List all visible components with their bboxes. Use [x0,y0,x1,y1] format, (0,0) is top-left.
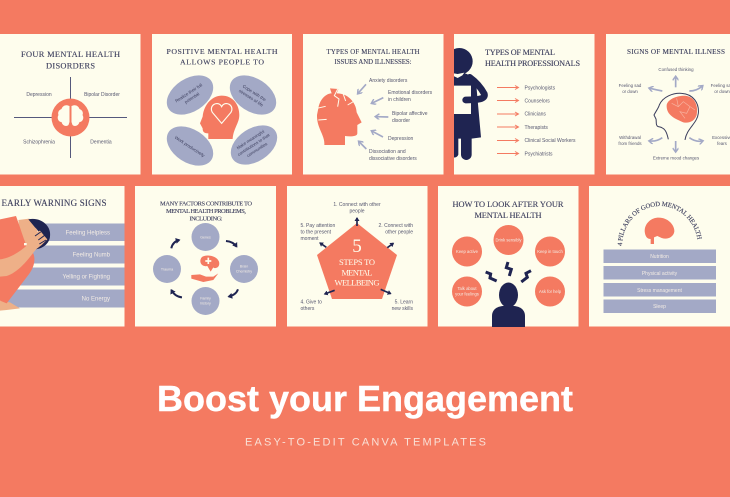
advice labels: Keep in touch [537,249,563,254]
step labels: to the present [300,230,332,236]
heading: types of issues: ISSUES AND ILLNESSES: [334,59,412,66]
heading: types of issues: TYPES OF MENTAL HEALTH [326,49,420,56]
step labels: 2. Connect with [379,223,413,229]
heading: early warning: EARLY WARNING SIGNS [2,198,106,208]
icon: professional with clipboard [454,48,488,160]
labels: Clinical Social Workers [524,138,576,144]
factor labels: history [200,302,211,306]
labels: Bipolar Disorder [84,92,120,98]
icon: brain in circle [52,98,90,136]
factor labels: Brain [240,264,248,268]
ellipse: meaningful contributions: contributions to their [237,132,271,157]
heading: four disorders: FOUR MENTAL HEALTH [21,50,120,59]
bar labels [63,230,111,302]
panel: positive mental health [152,34,292,174]
labels: Depression [388,136,414,142]
labels: Psychiatrists [524,152,553,158]
step labels: 5. Pay attention [300,223,335,229]
ellipse: work productively: Work productively [174,135,206,158]
ellipse: cope with stresses [223,67,283,123]
heading: types of professionals: TYPES OF MENTAL [485,48,555,57]
labels: Psychologists [524,86,556,92]
heading: curved 4 pillars: 4 PILLARS OF GOOD MENTAL HEALTH [618,202,702,246]
labels: Dementia [90,140,112,146]
bar labels: Yelling or Fighting [63,274,110,280]
panel: 5 steps [287,186,428,326]
advice labels: Keep active [456,249,479,254]
cross divider [14,77,127,158]
factor circles [153,223,258,315]
labels: disorder [392,118,410,124]
ellipse: meaningful contributions [224,117,284,173]
labels [369,78,433,162]
heading: positive mental health: POSITIVE MENTAL HEALTH [166,47,278,56]
bar labels: Feeling Numb [73,252,111,258]
labels: dissociative disorders [369,156,417,162]
labels: from friends [618,141,642,146]
bar labels: Feeling Helpless [66,230,110,236]
bar labels: No Energy [82,296,110,302]
step labels: 1. Connect with other [333,202,381,208]
arrows list [497,88,518,154]
step labels: new skills [392,306,413,312]
step labels [300,202,413,312]
icon: cracked head [317,88,362,145]
ellipse: realize potential: potential [184,91,200,105]
labels: Dissociation and [369,149,406,155]
labels: Clinicians [524,112,546,118]
pentagon text: MENTAL [342,268,372,278]
main headline: Boost your Engagement [157,378,573,419]
heading: types of professionals: HEALTH PROFESSIONALS [485,59,580,68]
panel: types of issues [303,34,444,174]
heading: many factors: MANY FACTORS CONTRIBUTE TO [160,200,252,208]
pentagon [317,223,397,299]
labels [524,86,576,158]
arrows [650,77,702,151]
step labels: 5. Learn [395,300,413,306]
step labels: people [349,208,365,214]
icon: hand holding brain [191,255,219,282]
labels [23,92,120,146]
icon: brain [645,218,674,244]
labels: Extreme mood changes [653,156,700,160]
pentagon text: 5 [352,236,362,257]
subtitle: EASY-TO-EDIT CANVA TEMPLATES [245,436,486,448]
ellipse: cope with stresses: stresses of life [238,88,265,108]
step labels: 4. Give to [300,300,322,306]
pillar bars [604,250,716,313]
panel: many factors [135,186,276,326]
heading: look after: HOW TO LOOK AFTER YOUR [452,200,564,209]
labels: Depression [26,92,52,98]
figure: person holding head [0,216,50,311]
labels: Schizophrenia [23,140,55,146]
panel: how to look after [438,186,578,327]
step labels: other people [385,230,413,236]
advice labels: Ask for help [539,289,562,294]
ellipse: realize potential [160,67,220,123]
icon: head with heart [200,96,239,139]
cycle arrows [171,240,238,297]
labels: Feeling sad [619,83,642,88]
ellipse: work productively [160,118,220,174]
factor labels: Chemistry [236,270,252,274]
panel: early warning signs [0,186,124,326]
labels: in children [388,97,411,103]
icon: lightning bolts [486,262,531,282]
labels: Emotional disorders [388,90,433,96]
labels: or down [714,89,730,94]
heading: many factors: INCLUDING: [190,216,223,222]
bars [7,224,124,308]
ellipse: realize potential: Realize their full [174,82,203,104]
step labels: others [300,306,315,312]
heading: many factors: MENTAL HEALTH PROBLEMS, [166,208,246,215]
arrows [358,84,388,149]
pillar labels [637,254,682,310]
factor labels: Trauma [161,268,173,272]
heading: four disorders: DISORDERS [46,62,95,70]
step arrows [320,218,393,294]
labels: Anxiety disorders [369,78,408,84]
labels: fears [717,141,728,146]
icon: head with brain [654,93,698,140]
panel: 4 pillars [589,186,730,326]
labels: Confused thinking [658,67,694,72]
ellipse: cope with stresses: Cope with the [242,83,267,103]
advice labels: your feelings [455,292,479,296]
panel: signs of mental illness [606,34,730,174]
icon: person [492,282,525,327]
ellipse: meaningful contributions: Make meaningful [236,129,265,150]
advice labels: Drink sensibly [495,238,522,242]
pentagon text: WELLBEING [334,278,380,288]
pillar labels: Physical activity [642,271,678,277]
pillar labels: Sleep [653,304,666,310]
panel: types of professionals [446,34,594,174]
factor labels [161,236,252,306]
advice circles [452,225,565,306]
heading: signs: SIGNS OF MENTAL ILLNESS [627,48,725,56]
factor labels: Genes [200,236,211,240]
pentagon text [334,236,380,288]
labels: Bipolar affective [392,111,428,117]
ellipse: meaningful contributions: communities [246,141,268,158]
advice labels [455,238,563,296]
step labels: moment [300,236,319,242]
heading: positive mental health: ALLOWS PEOPLE TO [180,58,264,66]
labels: Therapists [524,125,548,131]
advice labels: Talk about [457,286,477,291]
labels: Withdrawal [619,135,641,140]
labels: Counselors [524,98,550,104]
pillar labels: Stress management [637,288,682,294]
heading: look after: MENTAL HEALTH [474,211,542,220]
factor labels: Family [200,296,211,300]
pillar labels: Nutrition [650,254,669,260]
panel: four mental health disorders [0,34,140,174]
pentagon text: STEPS TO [339,257,375,267]
labels [618,67,730,160]
labels: or down [622,89,638,94]
